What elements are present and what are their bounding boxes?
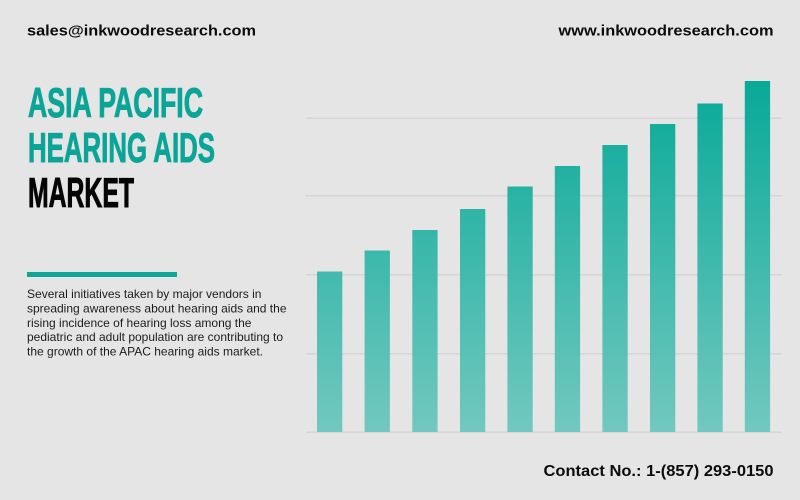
- title line: Hearing Aids: HEARING AIDS: [28, 124, 215, 171]
- accent rule: [27, 272, 177, 277]
- bars: [317, 81, 770, 432]
- description text: Several initiatives taken by major vendors in: [27, 287, 262, 301]
- description text: spreading awareness about hearing aids and the: [27, 301, 287, 315]
- description text: rising incidence of hearing loss among the: [27, 316, 252, 330]
- description text: pediatric and adult population are contributing to: [27, 330, 283, 344]
- email address: sales@inkwoodresearch.com: [27, 22, 256, 40]
- description text: the growth of the APAC hearing aids market.: [27, 345, 263, 359]
- grid lines: [305, 118, 782, 433]
- title: [28, 79, 215, 216]
- description text: [27, 287, 287, 359]
- title line: Asia Pacific: ASIA PACIFIC: [28, 79, 203, 126]
- contact number: Contact No.: 1-(857) 293-0150: [544, 463, 774, 480]
- title line: Market: MARKET: [28, 169, 134, 216]
- website address: www.inkwoodresearch.com: [557, 22, 774, 40]
- bar chart: [305, 81, 782, 433]
